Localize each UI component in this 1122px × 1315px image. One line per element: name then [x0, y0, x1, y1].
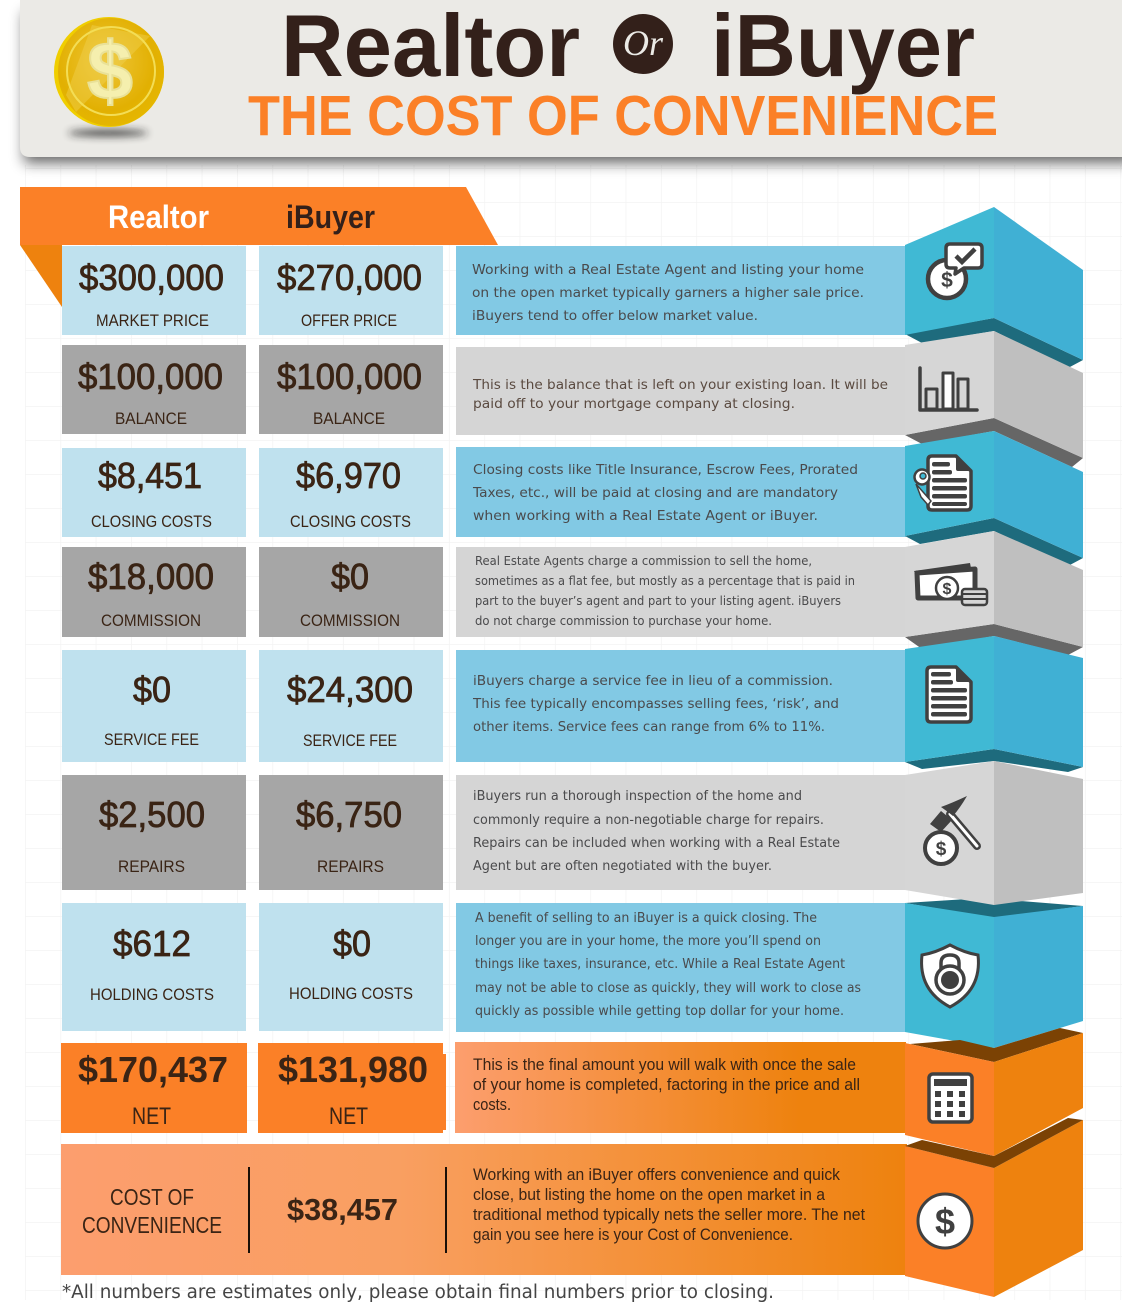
row: commission	[62, 547, 906, 637]
row: cost of convenience: CONVENIENCE	[82, 1212, 222, 1238]
row: closing costs: $6,970	[296, 455, 401, 496]
row: repairs: commonly require a non-negotiable charge for repairs.	[473, 813, 824, 828]
row: balance: $100,000	[78, 356, 223, 397]
row: closing costs: $8,451	[98, 455, 202, 496]
header band	[20, 0, 1122, 163]
3D block: cost of convenience	[905, 1118, 1083, 1297]
row: balance: BALANCE	[313, 409, 385, 428]
row: commission: do not charge commission to purchase your home.	[475, 614, 772, 628]
3D block: net	[905, 1028, 1083, 1156]
row: closing costs: CLOSING COSTS	[91, 512, 212, 531]
row: repairs: iBuyers run a thorough inspection of the home and	[473, 789, 802, 804]
row: closing costs	[62, 447, 906, 537]
row: market price: iBuyers tend to offer below market value.	[472, 308, 758, 324]
row: repairs: $6,750	[296, 794, 402, 835]
row: closing costs: when working with a Real Estate Agent or iBuyer.	[473, 508, 818, 524]
row: net: This is the final amount you will walk with once the sale	[473, 1056, 856, 1074]
column header ribbon	[20, 187, 498, 307]
row: holding costs: $612	[113, 923, 191, 964]
row: repairs	[62, 775, 906, 890]
row: cost of convenience	[61, 1144, 907, 1275]
row: service fee: $24,300	[287, 669, 413, 710]
row: holding costs: things like taxes, insurance, etc. While a Real Estate Agent	[475, 957, 845, 972]
title: Or	[623, 23, 664, 63]
row: closing costs: CLOSING COSTS	[290, 512, 411, 531]
row: market price: MARKET PRICE	[96, 311, 209, 330]
row: balance: $100,000	[277, 356, 422, 397]
icon: dollar circle	[918, 1194, 972, 1248]
row: closing costs: Closing costs like Title Insurance, Escrow Fees, Prorated	[473, 462, 858, 478]
row: commission: $18,000	[88, 556, 214, 597]
row: commission: COMMISSION	[300, 611, 400, 630]
icon: pickaxe and coin	[925, 796, 977, 864]
row: repairs: Repairs can be included when working with a Real Estate	[473, 836, 840, 851]
column header ribbon: Realtor	[108, 199, 209, 235]
row: commission: COMMISSION	[101, 611, 201, 630]
3D block: balance	[905, 331, 1083, 467]
row: net: NET	[329, 1103, 368, 1130]
row: service fee: SERVICE FEE	[303, 731, 397, 750]
icon: banknotes: $	[943, 581, 952, 598]
row: net: costs.	[473, 1096, 511, 1114]
3D block: commission	[905, 531, 1083, 655]
row: service fee: other items. Service fees can range from 6% to 11%.	[473, 719, 825, 735]
row: holding costs: quickly as possible while getting top dollar for your home.	[475, 1004, 844, 1019]
row: cost of convenience: close, but listing the home on the open market in a	[473, 1186, 826, 1204]
row: net: $170,437	[78, 1049, 228, 1090]
icon: calculator	[929, 1074, 972, 1122]
icon: document with key	[914, 456, 971, 510]
row: repairs: REPAIRS	[317, 857, 384, 876]
icon: coin with speech bubble check	[928, 244, 982, 298]
row: balance: BALANCE	[115, 409, 187, 428]
icon: dollar circle: $	[935, 1201, 955, 1242]
3D block: market price	[905, 207, 1083, 368]
row: holding costs: A benefit of selling to an iBuyer is a quick closing. The	[475, 911, 817, 926]
row: service fee: SERVICE FEE	[104, 730, 199, 749]
3D block: repairs	[905, 761, 1083, 905]
row: market price: $300,000	[79, 257, 224, 298]
row: cost of convenience: Working with an iBuyer offers convenience and quick	[473, 1166, 841, 1184]
row: net: of your home is completed, factoring in the price and all	[473, 1076, 860, 1094]
row: market price: OFFER PRICE	[301, 311, 397, 330]
row: service fee: $0	[133, 669, 171, 710]
row: cost of convenience: gain you see here is your Cost of Convenience.	[473, 1226, 793, 1244]
title	[281, 0, 975, 95]
icon: gold coin: $	[87, 26, 133, 117]
row: cost of convenience: COST OF	[110, 1184, 194, 1210]
row: net: NET	[132, 1103, 171, 1130]
row: service fee	[62, 650, 906, 762]
icon: shield with padlock	[922, 945, 978, 1007]
icon: coin with speech bubble check: $	[941, 269, 953, 292]
row: commission: Real Estate Agents charge a commission to sell the home,	[475, 554, 812, 568]
row: repairs: $2,500	[99, 794, 205, 835]
3D block: holding costs	[905, 898, 1083, 1048]
row: holding costs	[62, 903, 906, 1032]
row: repairs: REPAIRS	[118, 857, 185, 876]
icon: document	[927, 667, 971, 722]
3D block: service fee	[905, 636, 1083, 772]
row: repairs: Agent but are often negotiated with the buyer.	[473, 859, 772, 874]
row: cost of convenience: $38,457	[287, 1192, 398, 1227]
row: commission: $0	[331, 556, 369, 597]
footnote: *All numbers are estimates only, please obtain final numbers prior to closing.	[62, 1282, 774, 1303]
row: commission: part to the buyer’s agent and part to your listing agent. iBuyers	[475, 594, 841, 608]
row: balance	[62, 345, 906, 435]
row: commission: sometimes as a flat fee, but mostly as a percentage that is paid in	[475, 574, 855, 588]
row: net	[61, 1042, 906, 1133]
row: closing costs: Taxes, etc., will be paid at closing and are mandatory	[472, 485, 838, 501]
row: holding costs: may not be able to close as quickly, they will work to close as	[475, 981, 861, 996]
row: balance: This is the balance that is left on your existing loan. It will be	[472, 377, 888, 393]
row: cost of convenience: traditional method typically nets the seller more. The net	[473, 1206, 865, 1224]
icon: gold coin	[54, 17, 164, 136]
row: holding costs: longer you are in your home, the more you’ll spend on	[475, 934, 821, 949]
row: net: $131,980	[278, 1049, 428, 1090]
subtitle: THE COST OF CONVENIENCE	[248, 84, 998, 148]
icon: banknotes	[914, 563, 987, 605]
row: balance: paid off to your mortgage company at closing.	[473, 396, 795, 412]
row: holding costs: HOLDING COSTS	[90, 985, 214, 1004]
3D block: closing costs	[905, 431, 1083, 566]
row: market price	[62, 246, 906, 335]
row: service fee: This fee typically encompasses selling fees, ‘risk’, and	[472, 696, 839, 712]
column header ribbon: iBuyer	[286, 199, 375, 235]
icon: pickaxe and coin: $	[936, 839, 947, 860]
row: market price: on the open market typically garners a higher sale price.	[472, 285, 864, 301]
row: market price: $270,000	[277, 257, 422, 298]
row: holding costs: HOLDING COSTS	[289, 984, 413, 1003]
row: service fee: iBuyers charge a service fee in lieu of a commission.	[473, 673, 833, 689]
row: holding costs: $0	[333, 923, 371, 964]
icon: bar chart	[920, 368, 977, 410]
row: market price: Working with a Real Estate Agent and listing your home	[472, 262, 864, 278]
